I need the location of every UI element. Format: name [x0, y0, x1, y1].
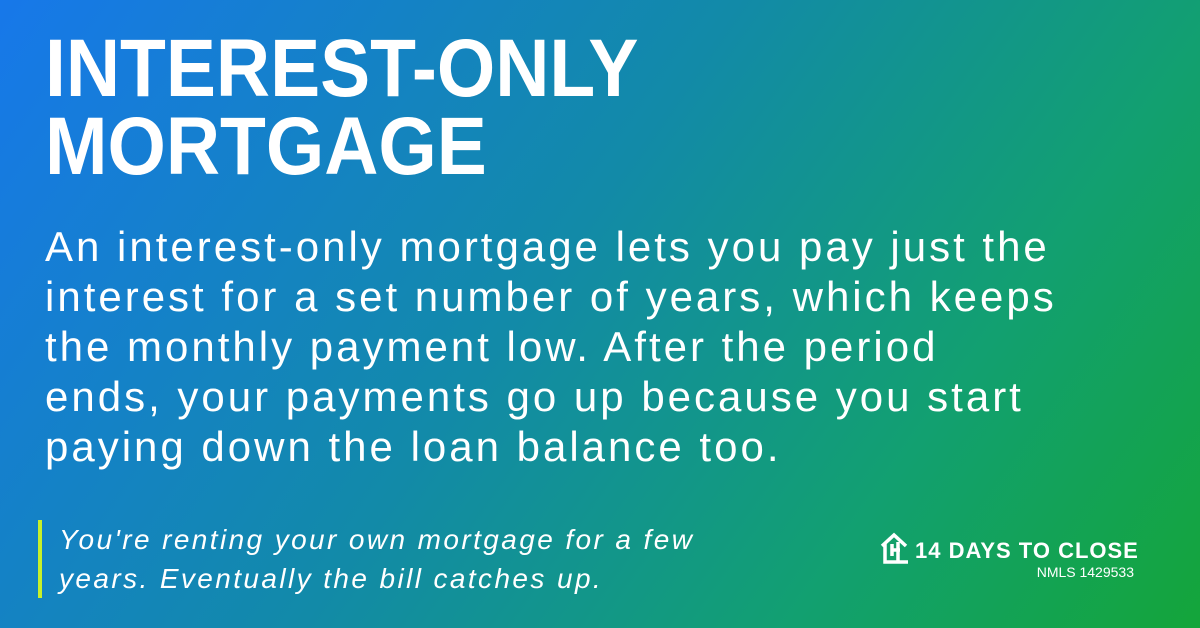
title: MORTGAGE: [45, 101, 487, 192]
quote callout: years. Eventually the bill catches up.: [59, 563, 603, 594]
body text: the monthly payment low. After the period: [45, 323, 938, 370]
logo: [880, 532, 1139, 580]
body text: An interest-only mortgage lets you pay just the: [45, 223, 1050, 270]
body text: paying down the loan balance too.: [45, 423, 782, 470]
NMLS: NMLS 1429533: [1037, 564, 1134, 580]
title: [45, 23, 638, 192]
body text: [45, 223, 1057, 470]
icon: house 14: [880, 532, 908, 564]
title: INTEREST-ONLY: [45, 23, 638, 114]
quote callout: [38, 520, 694, 598]
body text: ends, your payments go up because you start: [45, 373, 1024, 420]
brand name: 14 DAYS TO CLOSE: [915, 538, 1139, 563]
body text: interest for a set number of years, which keeps: [45, 273, 1057, 320]
quote callout: You're renting your own mortgage for a few: [59, 524, 694, 555]
